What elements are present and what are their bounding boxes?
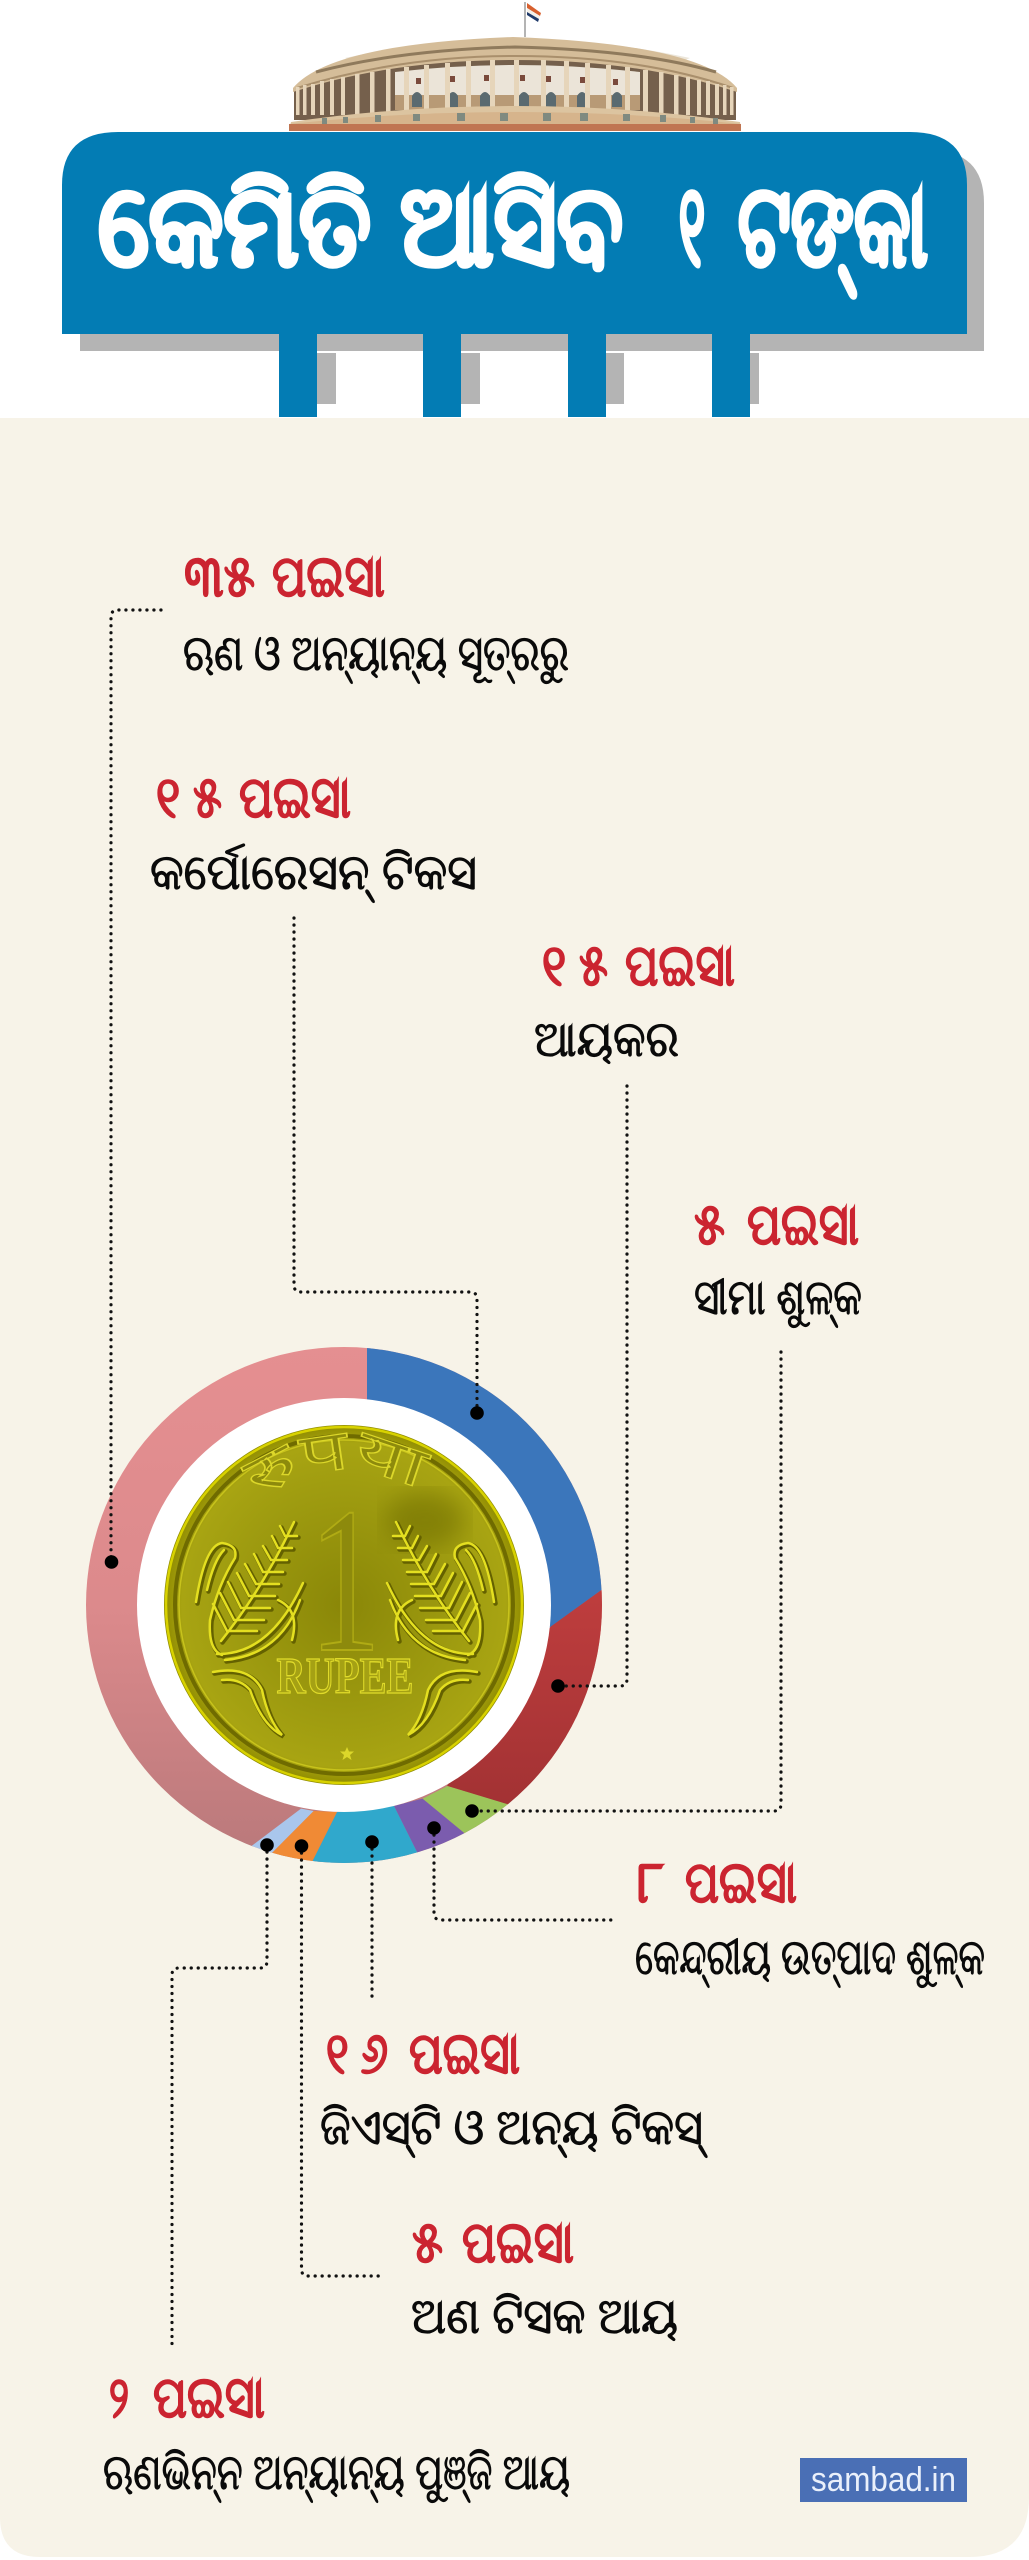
label: non tax: ୫ (412, 2210, 443, 2275)
roof (293, 37, 737, 92)
label: GST: ୧ ୬ (326, 2021, 388, 2086)
label: GST: ଜିଏସ୍‌ଟି ଓ ଅନ୍ୟ ଟିକସ୍ (320, 2099, 707, 2158)
title: ୧ (679, 163, 705, 290)
label: other capital: ୨ (109, 2365, 129, 2430)
donut chart: sources of one rupee (86, 1347, 602, 1863)
slice: central excise (422, 1786, 508, 1833)
slice: non tax (272, 1811, 337, 1861)
title (98, 163, 928, 298)
coin numeral: 1 (309, 1465, 381, 1695)
columns (296, 60, 734, 115)
inner wall (395, 65, 640, 98)
coin wheat right (387, 1522, 496, 1736)
label: income tax: ପଇସା (625, 933, 735, 998)
white ring (137, 1398, 551, 1812)
coin star (340, 1747, 354, 1760)
label: customs: ୫ (694, 1192, 725, 1257)
label: corporation tax: କର୍ପୋରେସନ୍ ଟିକସ (150, 844, 477, 903)
coin arc text (240, 1432, 432, 1488)
label: income tax: ଆୟକର (534, 1011, 679, 1067)
leader: corporation tax (294, 918, 484, 1420)
label: income tax (534, 933, 735, 1067)
slice: corporation tax (367, 1348, 602, 1628)
segments clipped to the ring (86, 1347, 602, 1863)
label: corporation tax (150, 765, 477, 903)
slice: income tax (447, 1590, 602, 1804)
leader: income tax (551, 1086, 627, 1693)
leader lines and dots (105, 610, 781, 2350)
label: GST (320, 2021, 707, 2158)
title: ଆସିବ (400, 163, 623, 290)
label: central excise: ୮ (637, 1850, 665, 1915)
windows (412, 92, 622, 107)
icon: parliament building (289, 2, 741, 131)
leader: central excise (427, 1821, 611, 1920)
label: customs: ପଇସା (747, 1192, 859, 1257)
leader: GST (365, 1835, 379, 2002)
label: GST: ପଇସା (409, 2021, 520, 2086)
label: corporation tax: ୧ ୫ (156, 765, 222, 830)
label: 35 paise: ପଇସା (272, 544, 385, 609)
coin wheat left (196, 1522, 304, 1736)
label: income tax: ୧ ୫ (542, 933, 608, 998)
board (62, 132, 967, 334)
label: central excise (635, 1850, 985, 1988)
colonnade backing (294, 56, 736, 120)
label: 35 paise: ଋଣ ଓ ଅନ୍ୟାନ୍ୟ ସୂତ୍ରରୁ (183, 625, 569, 684)
leader: 35 paise (105, 610, 161, 1569)
label: non tax (411, 2210, 678, 2344)
leader: customs (465, 1352, 781, 1818)
label: 35 paise (183, 544, 569, 684)
board shadow (80, 150, 984, 404)
slice: debt 35 paise (80, 1340, 610, 1870)
coin arc text: रुपया (240, 1432, 432, 1488)
label: central excise: ପଇସା (685, 1850, 797, 1915)
board legs (279, 330, 750, 417)
base (289, 106, 741, 131)
flag (525, 2, 541, 37)
title: କେମିତି (98, 163, 371, 290)
label: non tax: ଅଣ ଟିସକ ଆୟ (411, 2288, 678, 2344)
label: customs: ସୀମା ଶୁଳ୍କ (694, 1269, 862, 1328)
label: other capital: ଋଣଭିନ୍ନ ଅନ୍ୟାନ୍ୟ ପୁଞ୍ଜି ଆୟ (103, 2444, 570, 2503)
slice: customs purple (394, 1798, 464, 1852)
label: other capital: ପଇସା (153, 2365, 265, 2430)
label: 35 paise: ୩୫ (184, 544, 255, 609)
label: corporation tax: ପଇସା (239, 765, 351, 830)
leader: non tax (295, 1839, 383, 2276)
slice: other capital (252, 1808, 314, 1853)
label: other capital (103, 2365, 570, 2503)
leader: other capital (172, 1838, 274, 2350)
title: ଟଙ୍କା (738, 163, 928, 298)
icon: one rupee coin (164, 1425, 524, 1785)
badge: sambad.in: sambad.in (811, 2461, 956, 2499)
coin word: RUPEE (276, 1648, 414, 1705)
label: non tax: ପଇସା (462, 2210, 574, 2275)
slice: GST (312, 1806, 418, 1863)
parapet (345, 39, 690, 62)
title board (62, 132, 967, 417)
label: customs (694, 1192, 862, 1328)
